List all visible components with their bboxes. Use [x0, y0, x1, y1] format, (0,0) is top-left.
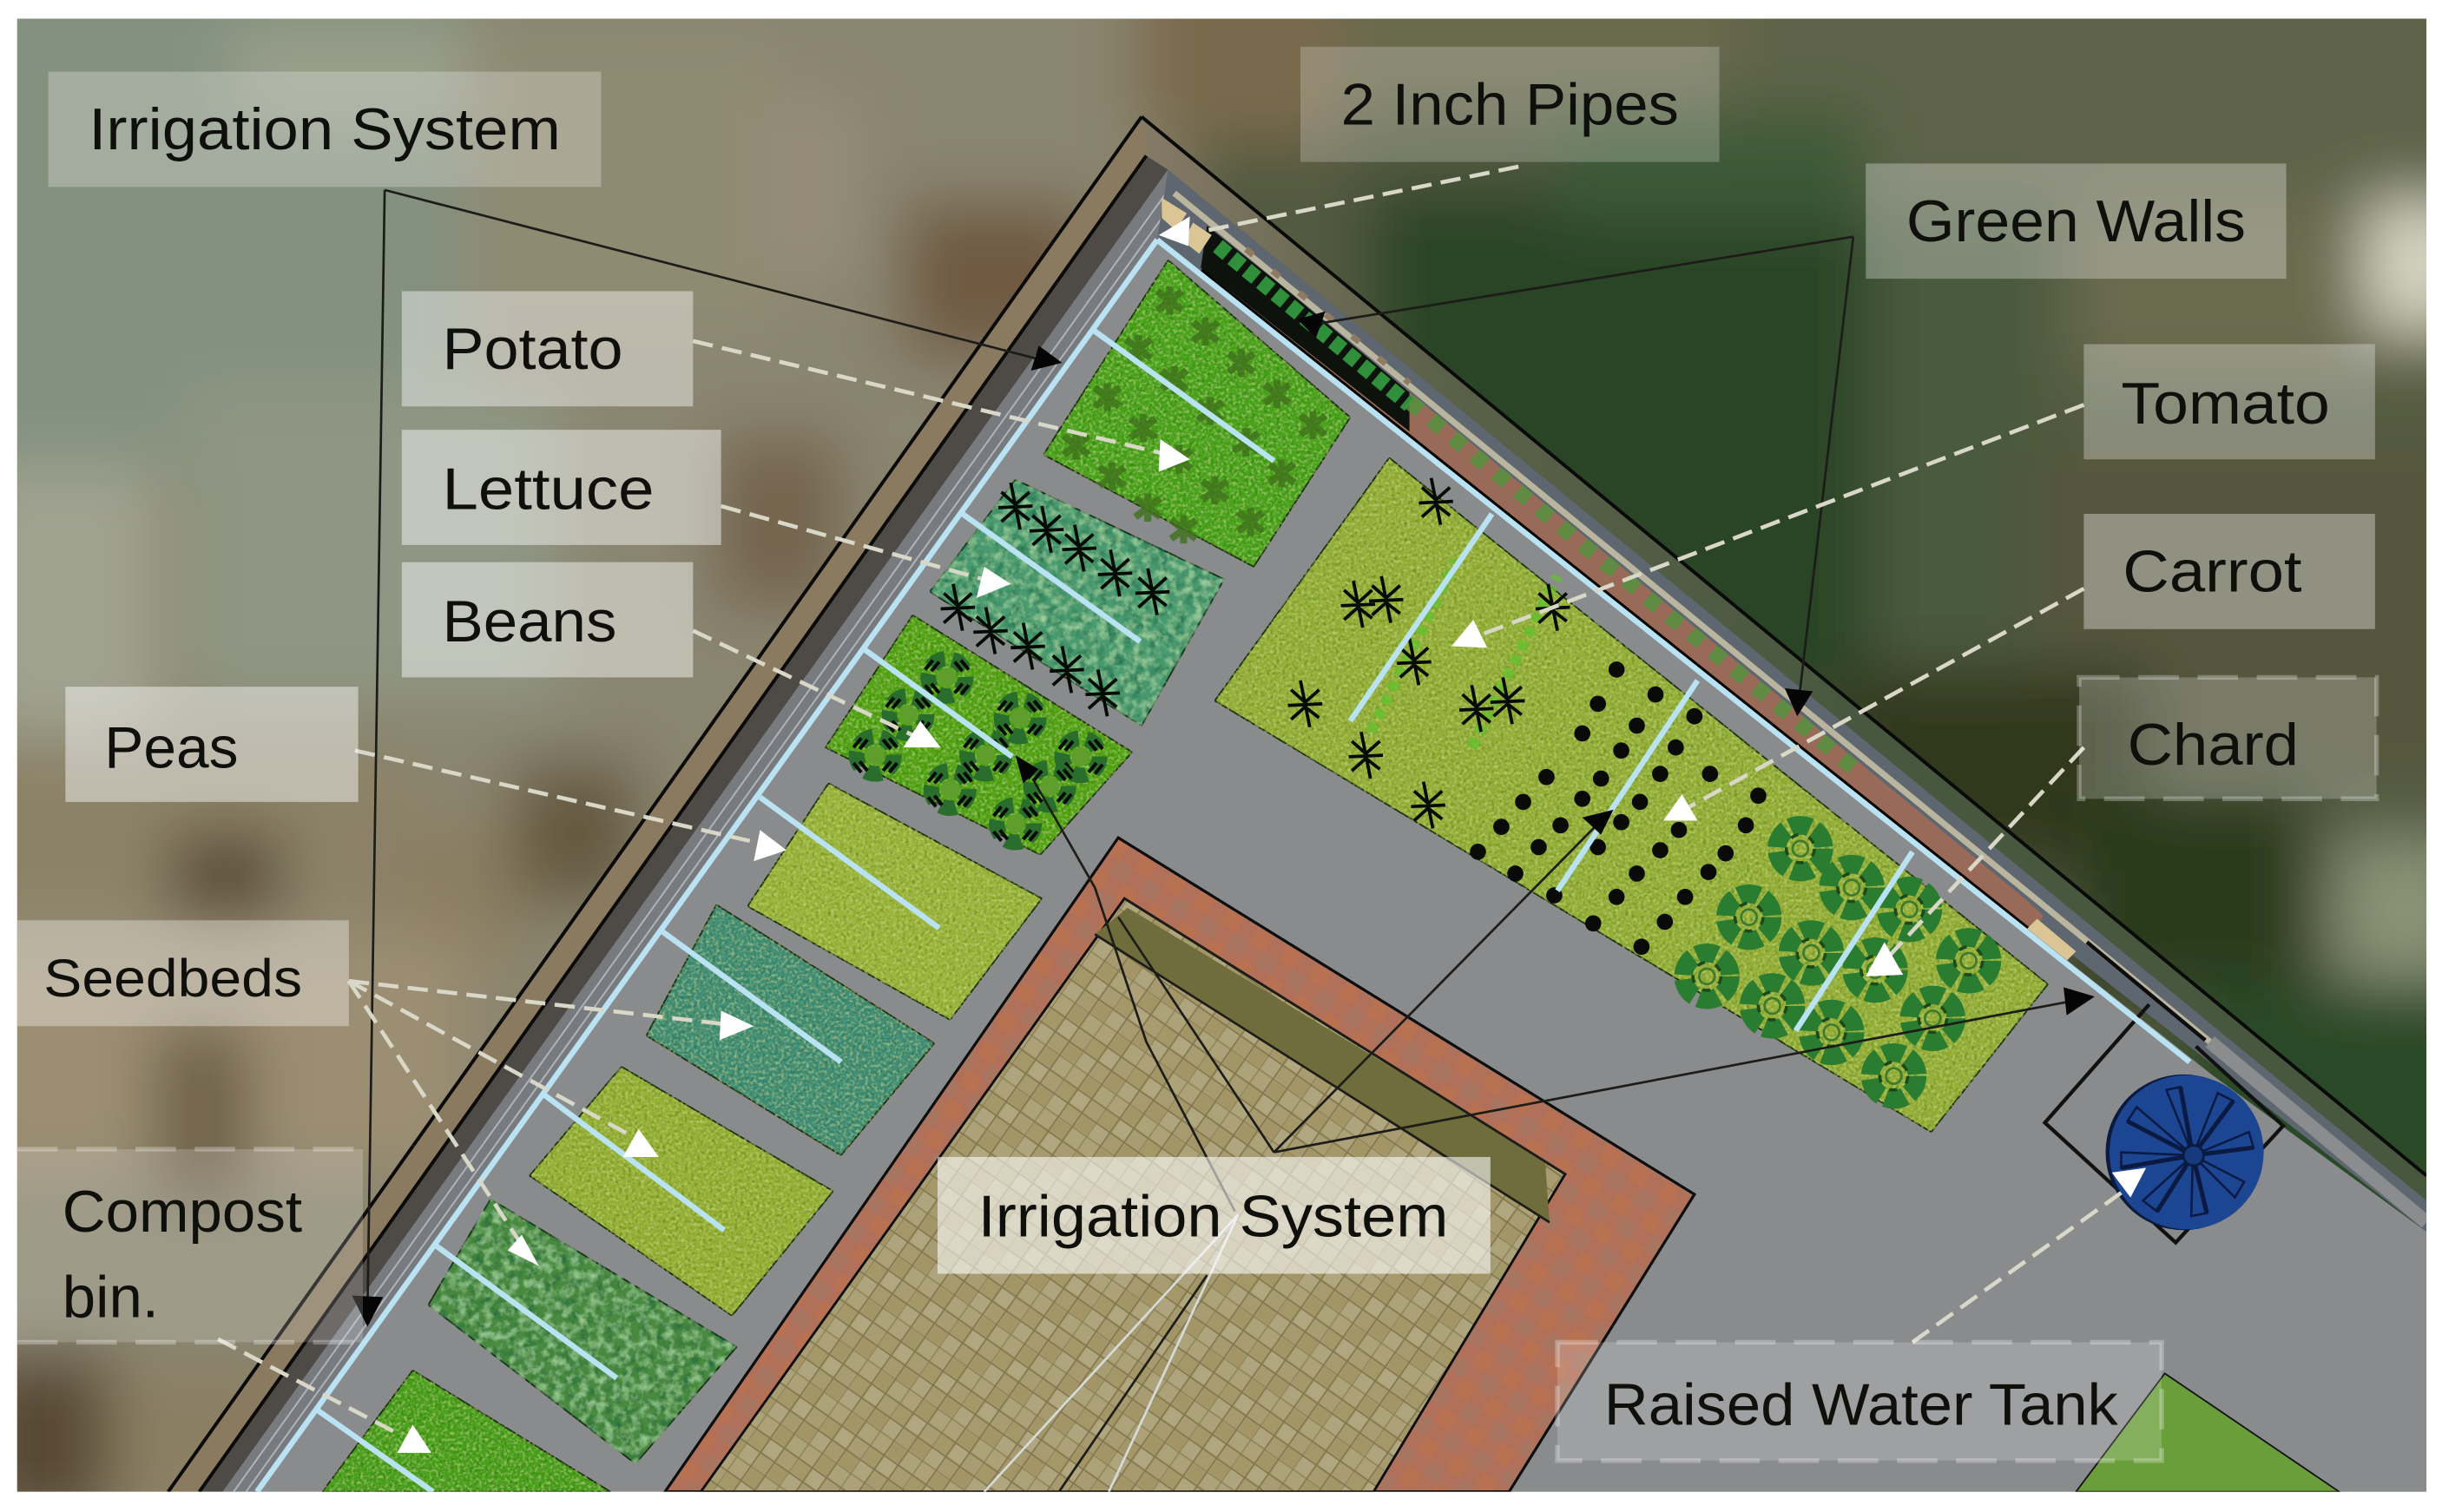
arrow: green walls leaders [1297, 237, 1853, 716]
arrow: beans [693, 631, 941, 747]
arrow: compost bin [218, 1339, 431, 1453]
lawn corner [2076, 1373, 2340, 1492]
label: irrigation system top [49, 72, 601, 187]
raised water tank [2105, 1075, 2264, 1230]
arrow: seedbeds to yellow bed [349, 981, 659, 1157]
label: potato [402, 291, 693, 406]
arrow: peas [355, 751, 787, 861]
label: potato: Potato [442, 316, 623, 382]
arrow: raised water tank [1912, 1168, 2146, 1342]
label: seedbeds: Seedbeds [43, 949, 302, 1008]
label: lettuce [402, 430, 721, 545]
arrow: seedbeds to teal bed [349, 981, 754, 1040]
seedbed: lettuce [930, 480, 1224, 726]
arrow: 2 inch pipes [1159, 167, 1518, 246]
arrow: tomato [1451, 404, 2083, 648]
label: peas: Peas [104, 714, 238, 780]
label: beans [402, 562, 693, 677]
arrow: irrigation system top leaders [352, 190, 1063, 1327]
label: compost bin [17, 1149, 363, 1342]
label: irrigation system top: Irrigation System [89, 96, 561, 162]
irrigation pipes [257, 240, 2189, 1492]
label: tomato [2083, 344, 2375, 459]
roof block with brick border [665, 838, 1695, 1492]
label: 2 inch pipes [1300, 47, 1720, 162]
seedbed: bright green [322, 1371, 610, 1492]
label: carrot: Carrot [2123, 539, 2302, 605]
label: green walls: Green Walls [1906, 188, 2246, 254]
label: irrigation system centre [938, 1157, 1491, 1274]
seedbed: compost mottled [428, 1199, 737, 1463]
label: chard: Chard [2128, 712, 2299, 778]
arrow: potato [693, 341, 1190, 472]
tank platform outline [2045, 1004, 2283, 1243]
seedbed: potato [1043, 260, 1350, 567]
label: beans: Beans [442, 588, 616, 654]
label: raised water tank [1557, 1342, 2162, 1461]
label: raised water tank: Raised Water Tank [1604, 1372, 2119, 1438]
seedbed: teal [647, 904, 934, 1155]
arrow: carrot [1663, 588, 2083, 820]
arrow: central irrigation leaders [1016, 755, 2095, 1212]
large plot: tomato, carrot, chard [1214, 457, 2048, 1132]
label: irrigation system centre: Irrigation System [978, 1183, 1448, 1249]
label: peas [65, 687, 359, 802]
label: lettuce: Lettuce [442, 457, 654, 523]
arrow: lettuce [721, 506, 1010, 598]
label: compost bin: bin. [63, 1265, 159, 1331]
label: chard [2079, 677, 2377, 799]
seedbed: peas [747, 783, 1042, 1020]
label: carrot [2083, 514, 2375, 629]
paved floor [257, 240, 2426, 1492]
label: compost bin: Compost [63, 1179, 302, 1245]
label: 2 inch pipes: 2 Inch Pipes [1341, 72, 1679, 138]
label: seedbeds [17, 920, 349, 1026]
seedbed: beans [826, 615, 1132, 855]
label: tomato: Tomato [2121, 371, 2330, 437]
arrow: chard [1866, 747, 2083, 976]
arrow: seedbeds to mottled bed [349, 981, 539, 1266]
label: green walls [1866, 163, 2287, 279]
seedbed: yellow green [530, 1067, 833, 1316]
